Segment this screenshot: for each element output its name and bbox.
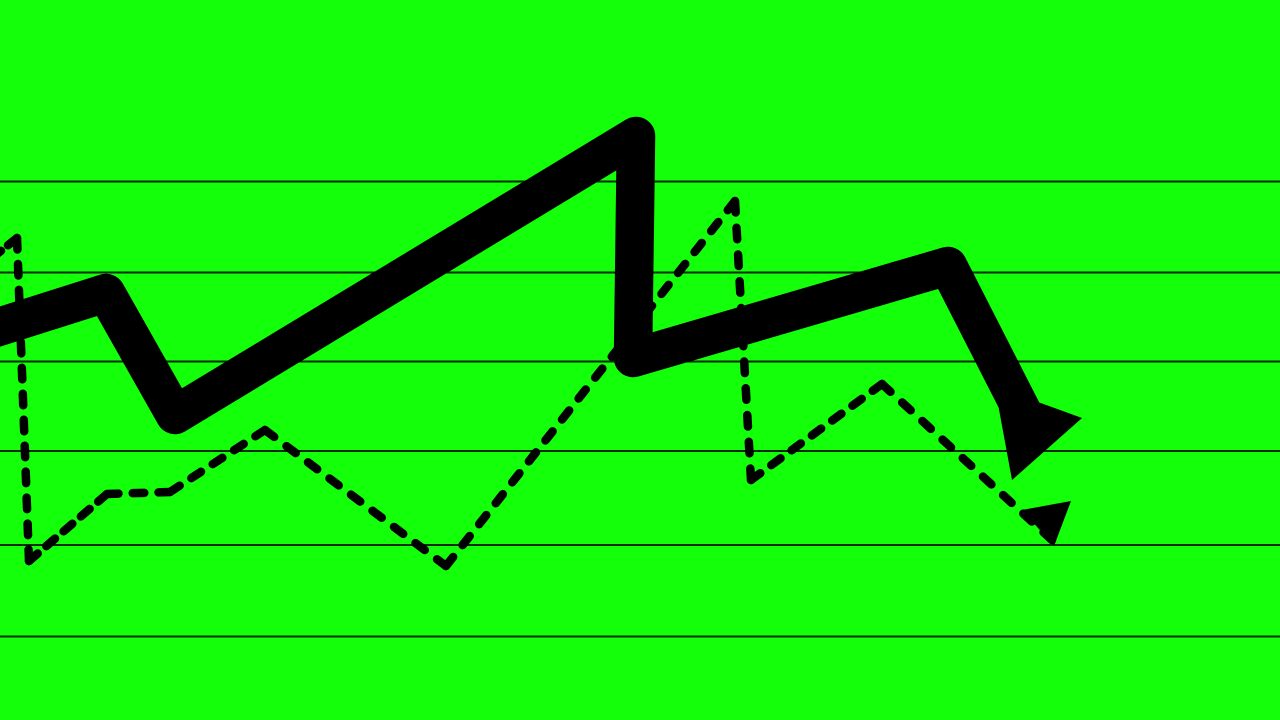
arrowhead: dashed line (1022, 501, 1071, 546)
horizontal grid lines (0, 182, 1280, 636)
arrowhead: thick line (998, 402, 1082, 480)
dashed line series (0, 201, 1052, 566)
thick line series (0, 136, 1022, 415)
